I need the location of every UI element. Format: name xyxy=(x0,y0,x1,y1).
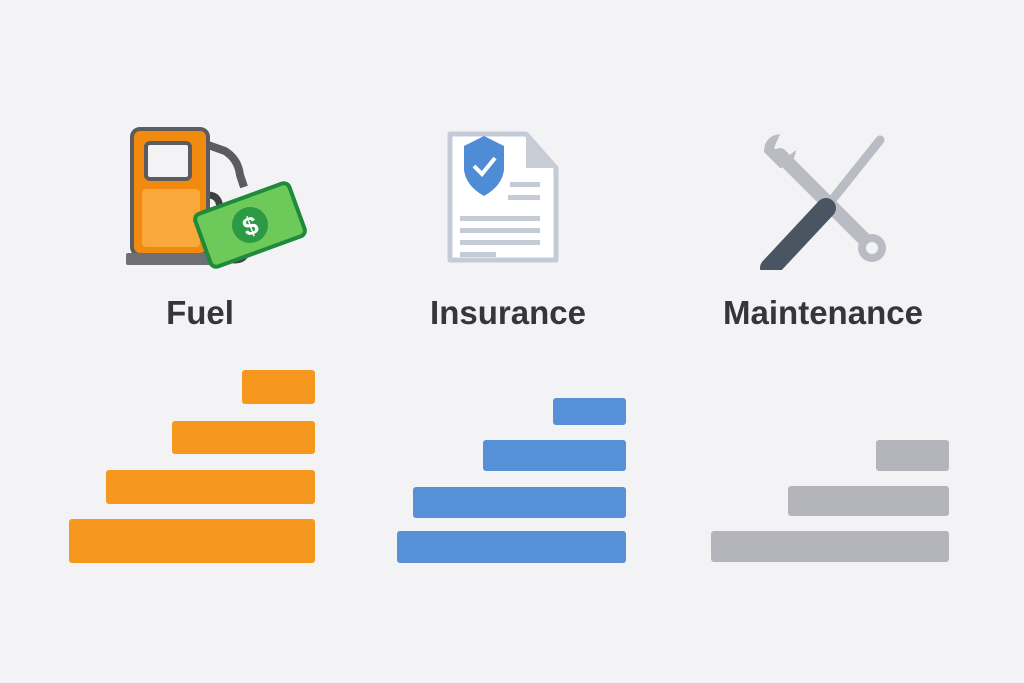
icon: fuel pump with money: $ xyxy=(238,209,263,243)
icon: fuel pump with money xyxy=(126,127,307,269)
label: Fuel: Fuel xyxy=(166,294,234,331)
icon: wrench and screwdriver xyxy=(760,134,886,270)
chart: fuel bars xyxy=(69,370,315,563)
label: Maintenance: Maintenance xyxy=(723,294,923,331)
label: Insurance: Insurance xyxy=(430,294,586,331)
chart: maintenance bars xyxy=(711,440,949,562)
chart: insurance bars xyxy=(397,398,626,563)
icon: insurance document xyxy=(448,132,558,262)
